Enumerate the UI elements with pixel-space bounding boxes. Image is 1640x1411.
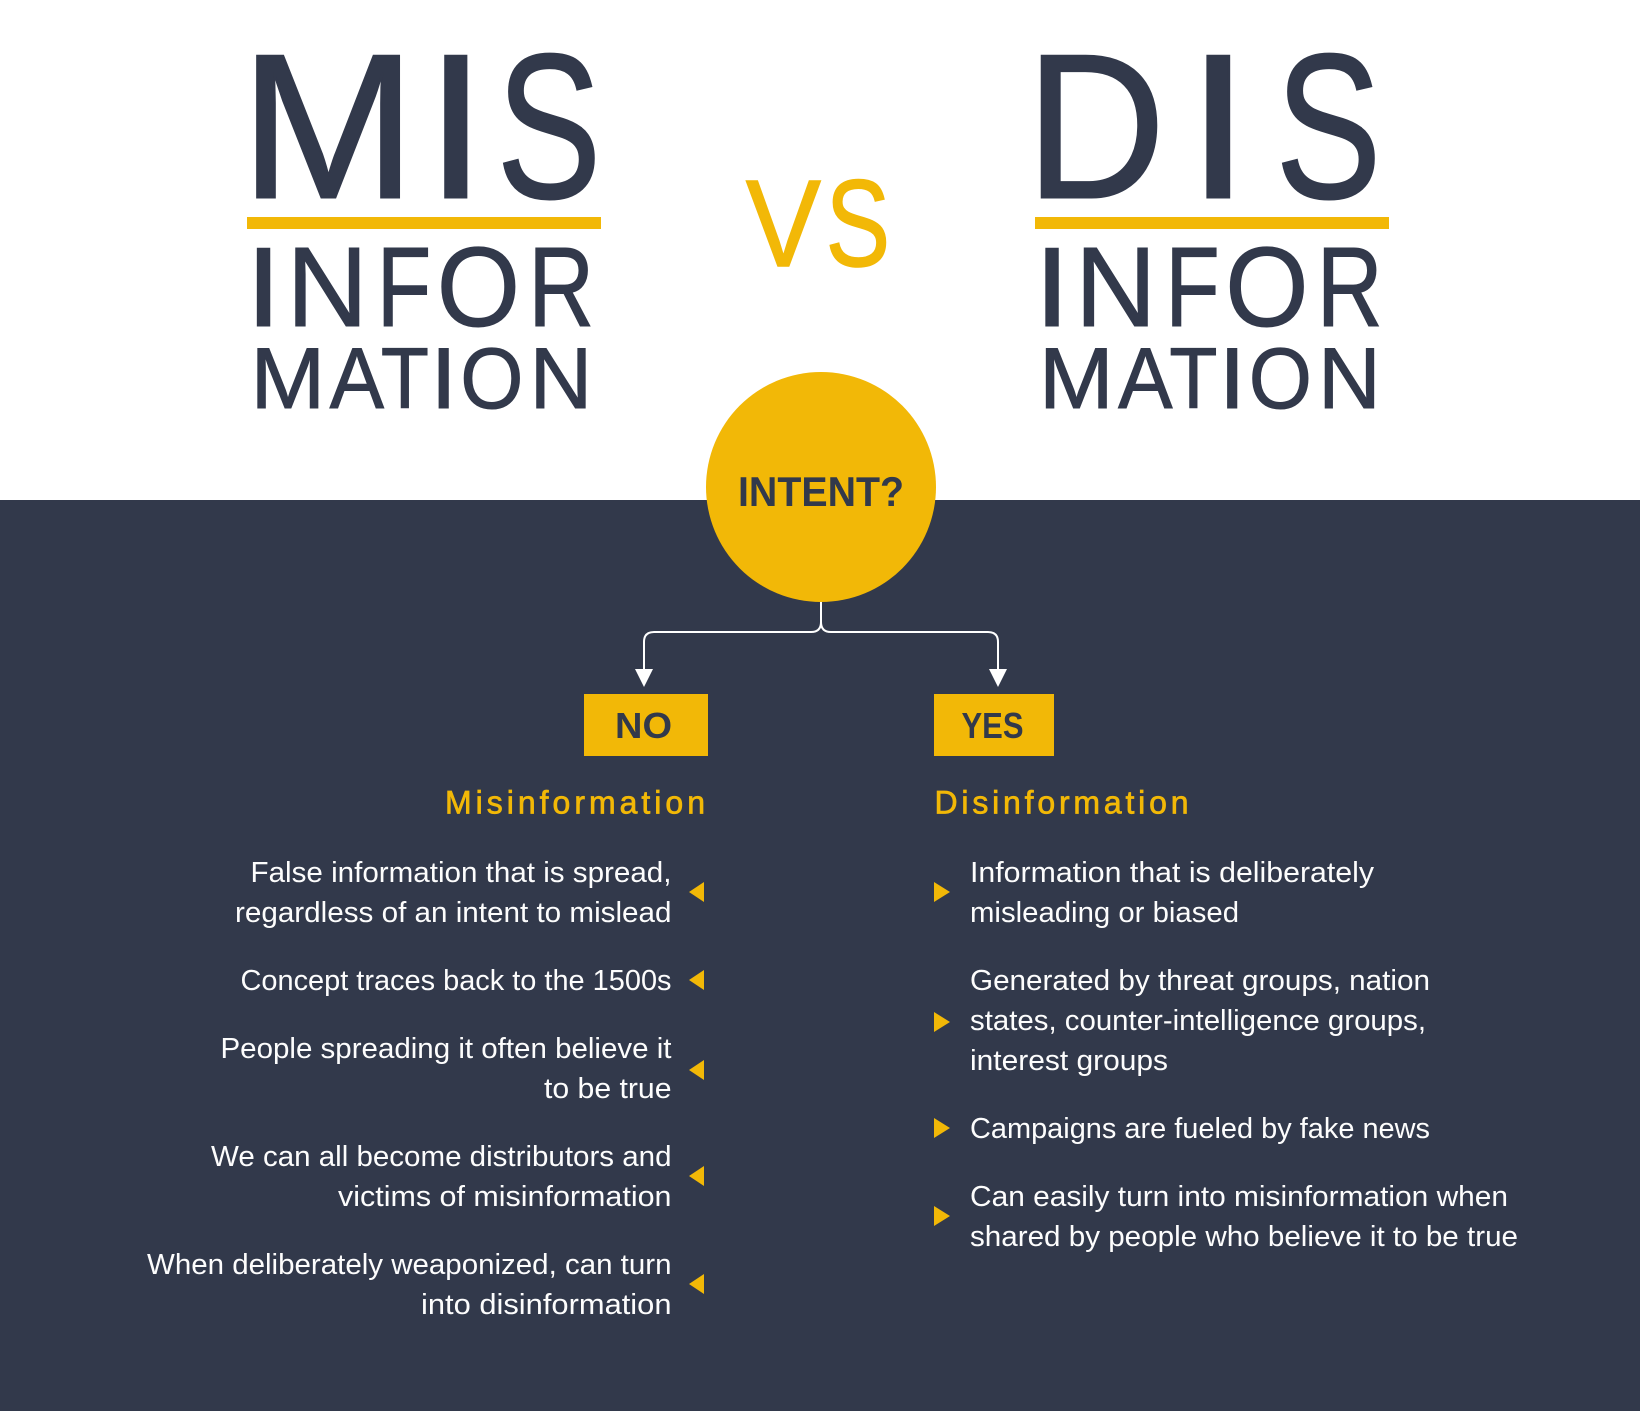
title: disinformation: N: [1318, 331, 1381, 427]
title: disinformation: [1026, 12, 1389, 427]
point: distributors and victims: We can all become distributors and: [211, 1141, 672, 1173]
title: misinformation: R: [528, 224, 594, 350]
heading: VS: S: [826, 156, 890, 293]
title: misinformation: F: [377, 224, 431, 350]
heading: VS: V: [746, 156, 821, 293]
title: misinformation: T: [381, 331, 429, 427]
title: disinformation: A: [1118, 331, 1173, 427]
title: disinformation: N: [1075, 224, 1156, 350]
point: deliberately misleading: [934, 857, 1375, 929]
point: believe true: People spreading it often believe it: [220, 1033, 672, 1065]
point: distributors and victims: victims of misinformation: [338, 1181, 672, 1213]
title: misinformation: M: [240, 12, 416, 242]
point: believe true: [220, 1033, 704, 1105]
point: concept origin: Concept traces back to the 1500s: [240, 965, 672, 997]
decision circle: intent: [706, 372, 936, 602]
point: turn into misinformation: shared by people who believe it to be true: [970, 1221, 1518, 1253]
title: misinformation: [240, 12, 601, 427]
title: misinformation: I: [425, 12, 487, 242]
decision circle: intent: INTENT?: [738, 468, 904, 515]
title: misinformation: I: [245, 224, 282, 350]
panel: dark lower background: [0, 500, 1640, 1411]
point: weaponized: into disinformation: [421, 1289, 672, 1321]
heading: Misinformation: Misinformation: [445, 784, 705, 820]
title: misinformation: O: [460, 331, 523, 427]
title: disinformation: T: [1169, 331, 1217, 427]
label: YES: [934, 694, 1054, 756]
title: disinformation: I: [1219, 331, 1246, 427]
point: turn into misinformation: Can easily turn into misinformation when: [970, 1181, 1508, 1213]
title: misinformation: I: [430, 331, 457, 427]
point: weaponized: When deliberately weaponized, can turn: [147, 1249, 672, 1281]
point: generated by groups: [934, 965, 1430, 1077]
title: disinformation: D: [1026, 12, 1166, 242]
point: fake news: Campaigns are fueled by fake news: [970, 1113, 1430, 1145]
list: misinformation points: [147, 857, 704, 1321]
point: believe true: to be true: [544, 1073, 672, 1105]
title: disinformation: O: [1249, 331, 1312, 427]
point: generated by groups: interest groups: [970, 1045, 1168, 1077]
point: generated by groups: states, counter-intelligence groups,: [970, 1005, 1426, 1037]
point: false information: False information that is spread,: [250, 857, 672, 889]
point: weaponized: [147, 1249, 704, 1321]
title: disinformation: I: [1034, 224, 1070, 350]
point: generated by groups: Generated by threat groups, nation: [970, 965, 1430, 997]
title: disinformation: I: [1186, 12, 1250, 242]
point: deliberately misleading: misleading or biased: [970, 897, 1239, 929]
point: false information: [235, 857, 704, 929]
panel: white header background: [0, 0, 1640, 500]
heading: Disinformation: Disinformation: [934, 784, 1188, 820]
point: distributors and victims: [211, 1141, 704, 1213]
label: YES: YES: [962, 705, 1024, 746]
title: disinformation: S: [1276, 12, 1381, 242]
title: disinformation: R: [1317, 224, 1383, 350]
label: NO: [584, 694, 708, 756]
arrow: connector to no and yes: [635, 602, 1007, 687]
title: misinformation: O: [437, 224, 520, 350]
title: misinformation: M: [250, 331, 325, 427]
list: disinformation points: [934, 857, 1518, 1253]
title: misinformation: N: [530, 331, 592, 427]
title: misinformation: S: [497, 12, 601, 242]
title: misinformation: N: [286, 224, 368, 350]
point: deliberately misleading: Information that is deliberately: [970, 857, 1375, 889]
label: NO: NO: [615, 705, 672, 746]
point: false information: regardless of an intent to mislead: [235, 897, 672, 929]
title: disinformation: M: [1039, 331, 1114, 427]
title: disinformation: F: [1165, 224, 1220, 350]
title: disinformation: O: [1225, 224, 1309, 350]
title: misinformation: A: [330, 331, 385, 427]
point: turn into misinformation: [934, 1181, 1518, 1253]
